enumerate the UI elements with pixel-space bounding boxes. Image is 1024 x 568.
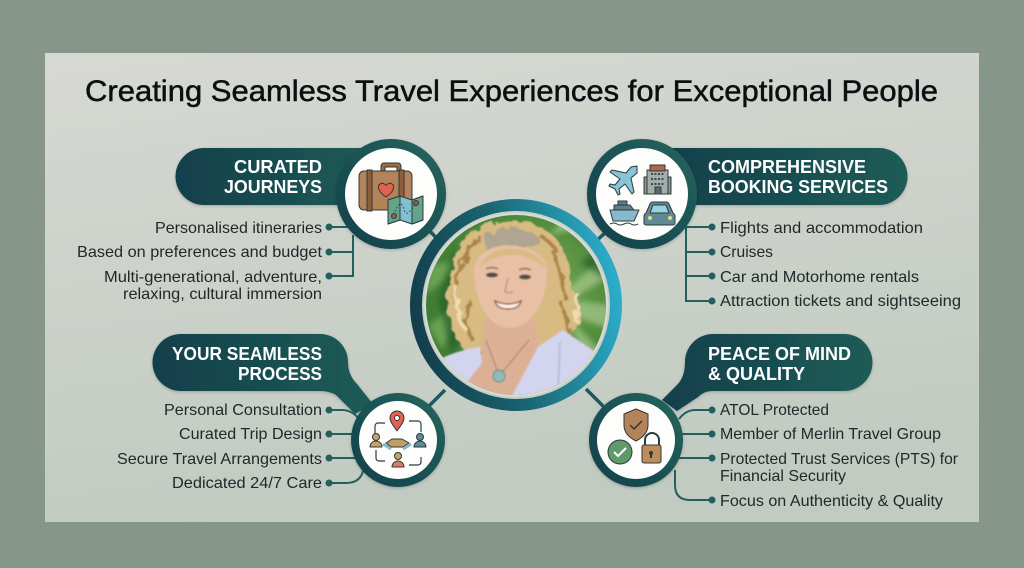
list: curated journeys: Based on preferences and budget	[77, 244, 323, 261]
panel: your seamless process	[117, 334, 445, 492]
heading pill with tail: peace of mind and quality	[662, 334, 872, 411]
main panel	[45, 53, 979, 522]
panel: comprehensive booking services	[587, 139, 961, 310]
heading: your seamless process: YOUR SEAMLESS	[172, 344, 322, 364]
connector lines: curated journeys	[329, 227, 355, 276]
heading pill: curated journeys	[176, 148, 380, 205]
list: your seamless process	[117, 402, 322, 492]
jacket	[442, 346, 483, 382]
list: comprehensive booking services: Cruises	[720, 244, 773, 261]
heading: your seamless process	[172, 344, 322, 384]
heading: comprehensive booking services: BOOKING SERVICES	[708, 177, 888, 197]
list: your seamless process: Secure Travel Arrangements	[117, 451, 322, 468]
list: peace of mind and quality	[720, 402, 959, 510]
connector lines: peace of mind and quality	[675, 410, 712, 500]
list: comprehensive booking services: Car and Motorhome rentals	[720, 269, 919, 286]
portrait photo	[426, 215, 606, 395]
heading pill with tail: your seamless process	[152, 334, 373, 414]
portrait ring	[416, 205, 616, 405]
icon badge: shield, check, padlock	[589, 393, 683, 487]
heading: peace of mind and quality: & QUALITY	[708, 364, 805, 384]
list: your seamless process: Personal Consultation	[164, 402, 322, 419]
connectors to central portrait	[427, 229, 607, 409]
icon badge: suitcase and map	[336, 139, 446, 249]
heading: peace of mind and quality	[708, 344, 851, 384]
heading: comprehensive booking services	[708, 157, 888, 197]
icon badge: plane, hotel, ship, car	[587, 139, 697, 249]
heading: peace of mind and quality: PEACE OF MIND	[708, 344, 851, 364]
list: peace of mind and quality: ATOL Protected	[720, 402, 829, 419]
list: peace of mind and quality: Protected Trust Services (PTS) for	[720, 451, 959, 468]
heading: curated journeys: CURATED	[234, 157, 322, 177]
connector lines: your seamless process	[329, 410, 363, 483]
list: peace of mind and quality: Focus on Authenticity & Quality	[720, 493, 943, 510]
list: comprehensive booking services	[720, 220, 961, 310]
bullet dots: curated journeys	[326, 224, 332, 280]
panel: curated journeys	[77, 139, 446, 303]
bullet dots: your seamless process	[326, 406, 332, 486]
list: peace of mind and quality: Member of Merlin Travel Group	[720, 426, 941, 443]
list: curated journeys	[77, 220, 323, 303]
panel: peace of mind and quality	[589, 334, 959, 510]
list: your seamless process: Dedicated 24/7 Care	[172, 475, 322, 492]
heading: your seamless process: PROCESS	[238, 364, 322, 384]
skin: neck and chest	[467, 318, 540, 395]
heading: curated journeys: JOURNEYS	[224, 177, 322, 197]
list: comprehensive booking services: Attraction tickets and sightseeing	[720, 293, 961, 310]
bullet dots: peace of mind and quality	[708, 406, 716, 504]
connector lines: comprehensive booking services	[686, 227, 712, 301]
heading: comprehensive booking services: COMPREHENSIVE	[708, 157, 866, 177]
central portrait	[416, 205, 616, 413]
list: curated journeys: Personalised itineraries	[155, 220, 322, 237]
list: curated journeys: Multi-generational, adventure,	[104, 269, 322, 286]
heading: curated journeys	[224, 157, 322, 197]
list: curated journeys: relaxing, cultural immersion	[123, 286, 322, 303]
face	[474, 246, 547, 328]
hair	[446, 221, 581, 353]
bullet dots: comprehensive booking services	[708, 224, 716, 304]
heading pill: comprehensive booking services	[660, 148, 908, 205]
list: comprehensive booking services: Flights and accommodation	[720, 220, 923, 237]
list: peace of mind and quality: Financial Security	[720, 468, 846, 485]
list: your seamless process: Curated Trip Design	[179, 426, 322, 443]
necklace	[486, 340, 529, 376]
title: Creating Seamless Travel Experiences for Exceptional People	[85, 75, 938, 108]
icon badge: process cycle	[351, 393, 445, 487]
